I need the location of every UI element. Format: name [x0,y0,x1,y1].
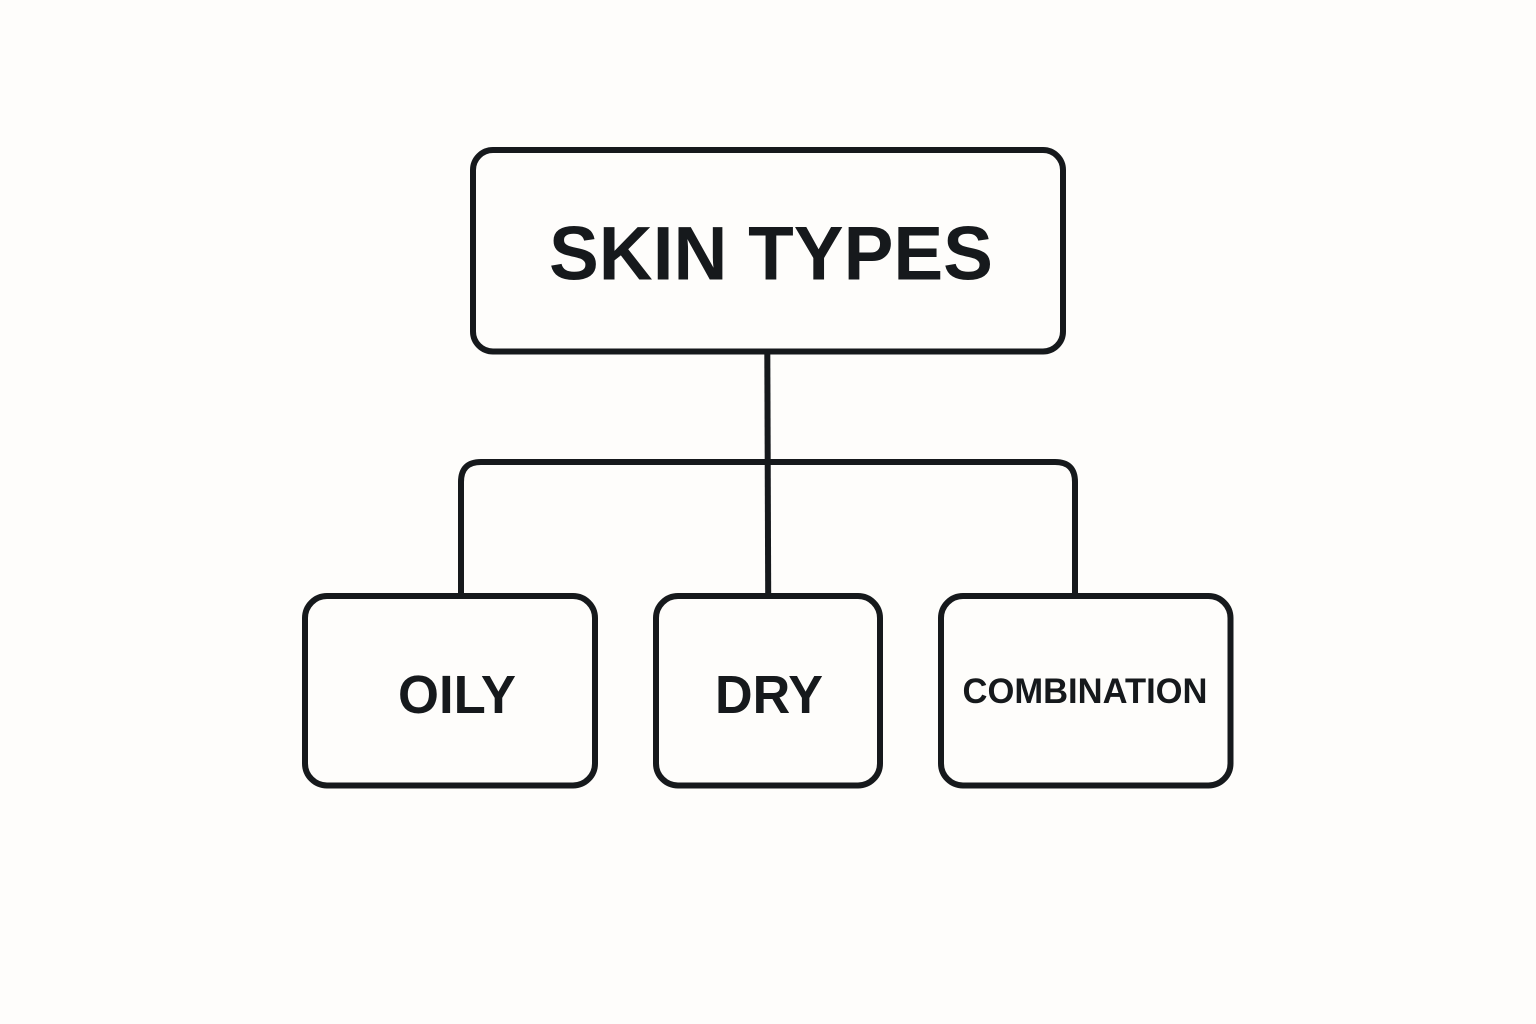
label: combination: COMBINATION [962,672,1208,711]
box: oily [305,596,595,786]
box: dry [656,596,880,786]
connector: root to dry box [764,351,771,596]
title: SKIN TYPES [549,212,993,296]
label: oily: OILY [398,665,516,725]
box: combination [941,596,1230,786]
root box: skin types [473,150,1063,352]
connector: branch to oily and combination [461,462,1075,596]
label: dry: DRY [715,665,823,725]
